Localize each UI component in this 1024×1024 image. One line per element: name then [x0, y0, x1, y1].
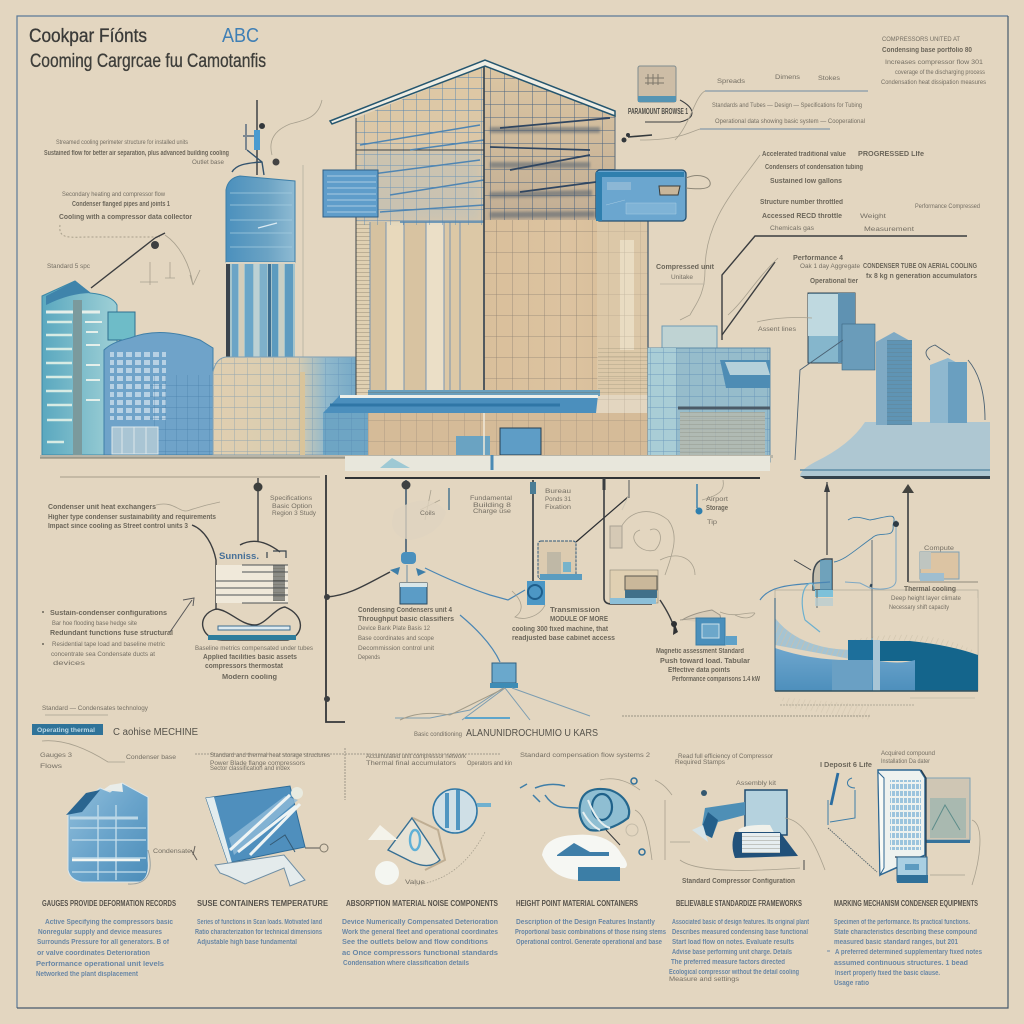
small marker top right of column 4: Storage: [706, 505, 728, 512]
text block: bullet list left: concentrate sea Condensate ducts at: [51, 651, 155, 658]
central tent apparatus: [395, 615, 590, 720]
annotation block: top right: coverage of the discharging process: [895, 69, 986, 76]
icon: laptop with funnel: Standard Compressor Configuration: [682, 878, 795, 885]
text column 5: Measure and settings: [669, 976, 740, 983]
pump unit column 2: Building 8: [473, 502, 511, 509]
text column 2: [195, 899, 329, 946]
text column 6: Insert properly fixed the basic clause.: [835, 970, 940, 977]
text column 3: [342, 899, 499, 967]
rule and text: lower left: [42, 705, 149, 715]
text block: bullet list left: Redundant functions fuse structural: [50, 630, 173, 637]
annotation block: beside right buildings: fx 8 kg n generation accumulators: [866, 273, 977, 280]
annotation strip below section labels: Standard and thermal heat storage structures: [210, 752, 331, 759]
text block: bullet list left: Bar hoe flooding base hedge site: [52, 620, 137, 627]
pump unit column 4: [604, 478, 695, 604]
text column 4: Description of the Design Features Instantly: [516, 919, 655, 926]
text column 5: Associated basic of design features. Its original plant: [672, 919, 810, 926]
annotation strip below section labels: Standard compensation flow systems 2: [520, 752, 650, 759]
annotation block: middle right: PROGRESSED LIfe: [858, 151, 924, 158]
water diagram device and arrows: Compute: [924, 545, 954, 552]
main building: roof: [330, 60, 615, 124]
water tower: [226, 165, 303, 357]
callout: condensing text upper left: Condenser unit heat exchangers: [48, 504, 156, 511]
text block: column 5: Magnetic assessment Standard: [656, 648, 744, 655]
title: [29, 25, 266, 72]
text column 5: Start load flow on notes. Evaluate results: [672, 939, 794, 946]
annotation block: middle right: Sustained low gallons: [770, 178, 842, 185]
text column 5: Describes measured condensing base functional: [672, 929, 808, 936]
annotation strip below section labels: Flows: [40, 763, 63, 770]
text column 1: GAUGES PROVIDE DEFORMATION RECORDS: [42, 899, 177, 908]
annotation block: upper left: Secondary heating and compressor flow: [62, 191, 165, 198]
text block: server caption: Applied facilities basic assets: [203, 654, 297, 661]
annotation block: upper left: Standard 5 spc: [47, 263, 91, 270]
text block: column 5: Performance comparisons 1.4 kW: [672, 676, 760, 683]
text block: water diagram caption: Thermal cooling: [904, 586, 956, 593]
icon: small laptop with caption: [628, 66, 692, 122]
icon: server unit on pedestal: [192, 478, 300, 640]
callout: condensing text upper left: Specifications: [270, 495, 313, 502]
text column 3: Condensation where classification details: [343, 960, 469, 967]
lower right water diagram: [775, 590, 978, 691]
text block: bullet list left: Residential tape load and baseline metric: [52, 641, 166, 648]
annotation block: upper left: Streamed cooling perimeter structure for installed units: [56, 139, 189, 146]
icon: server unit on pedestal: Sunniss.: [219, 551, 259, 561]
icon: blue solar panel: Condensate: [153, 848, 191, 855]
icon: tall server with screen: [820, 750, 980, 885]
text column 4: Proportional basic combinations of those rising stems: [515, 929, 666, 936]
text block: column 3: cooling 300 fixed machine, that: [512, 626, 609, 633]
pump unit column 3: Bureau: [545, 488, 571, 495]
text block: bullet list left: Sustain-condenser configurations: [50, 610, 167, 617]
icon: magnifier and cone: Value: [405, 879, 425, 886]
text column 6: Specimen of the performance. Its practical functions.: [834, 919, 970, 926]
left wall panel: [323, 170, 378, 217]
annotation strip below section labels: [40, 716, 870, 800]
text block: column 3: readjusted base cabinet access: [512, 635, 615, 642]
annotation strip below section labels: Accumulated unit compressor network: [366, 753, 467, 760]
annotation block: beside right buildings: Operational tier: [810, 278, 858, 285]
annotation strip below section labels: Sector classification and index: [210, 765, 291, 772]
text column 6: [827, 899, 982, 987]
icon: small laptop with caption: PARAMOUNT BROWSE 1: [628, 107, 688, 116]
text column 5: Ecological compressor without the detail cooling: [669, 969, 799, 976]
section label bar: C aohise MECHINE: [113, 727, 198, 738]
section label bar: [32, 724, 198, 738]
right building diagram: [795, 293, 990, 479]
text column 1: or valve coordinates Deterioration: [37, 950, 150, 957]
annotation block: top right: [881, 36, 987, 86]
text column 3: ac Once compressors functional standards: [342, 950, 498, 957]
pump unit column 2: [327, 480, 525, 604]
icon: eye swirl with white mound: [520, 778, 672, 881]
small marker top right of column 4: Tip: [707, 519, 717, 526]
section caption center: Basic conditioning: [414, 731, 462, 738]
annotation block: top right: COMPRESSORS UNITED AT: [882, 36, 960, 43]
text block: column 2: Device Bank Plate Basis 12: [358, 625, 430, 632]
text block: column 3: Transmission: [550, 607, 600, 614]
text column 6: measured basic standard ranges, but 201: [834, 939, 958, 946]
leader lines and text: upper right callout: Standards and Tubes — Design — Specifications for Tubing: [712, 102, 862, 109]
annotation strip below section labels: Read full efficiency of Compressor: [678, 753, 774, 760]
canopy and entrance: [323, 390, 648, 456]
low podium building: [213, 357, 365, 455]
leader lines and text: upper right callout: Stokes: [818, 75, 841, 82]
section caption center: [414, 728, 598, 739]
callout: leader line to left tower: [91, 233, 200, 288]
text column 1: Surrounds Pressure for all generators. B of: [37, 939, 170, 946]
icon: tall server with screen: Installation Da dater: [881, 758, 931, 765]
shaded rule under water diagram: [778, 697, 975, 720]
main vertical pipe: [324, 475, 345, 722]
callout: condensing text upper left: Region 3 Study: [272, 510, 317, 517]
annotation block: upper left: Outlet base: [192, 159, 224, 166]
section caption center: ALANUNIDROCHUMIO U KARS: [466, 728, 598, 739]
annotation block: middle right: Measurement: [864, 226, 914, 233]
annotation block: middle right: Performance Compressed: [915, 203, 980, 210]
text block: column 3: [512, 607, 615, 642]
icon: tall server with screen: I Deposit 6 Life: [820, 762, 872, 769]
text column 3: ABSORPTION MATERIAL NOISE COMPONENTS: [346, 899, 499, 908]
annotation block: beside right buildings: Performance 4: [793, 255, 843, 262]
annotation block: top right: Increases compressor flow 301: [885, 59, 983, 66]
annotation block: beside right buildings: Oak 1 day Aggregate: [800, 263, 860, 270]
annotation block: middle right: Condensers of condensation tubing: [765, 164, 863, 171]
text column 1: Performance operational unit levels: [36, 961, 164, 968]
annotation block: middle right: Accelerated traditional value: [762, 151, 846, 158]
text column 5: The preferred measure factors directed: [671, 959, 785, 966]
icon: laptop with funnel: Assembly kit: [736, 780, 776, 787]
text block: column 2: Throughput basic classifiers: [358, 616, 454, 623]
annotation block: middle right: Chemicals gas: [770, 225, 815, 232]
icon: blue solar panel: [66, 783, 197, 884]
text block: server caption: Baseline metrics compensated under tubes: [195, 645, 314, 652]
title: Cookpar Fíónts: [29, 26, 147, 47]
annotation strip below section labels: Required Stamps: [675, 759, 726, 766]
title: Cooming Cargrcae fɯ Camotanfis: [30, 51, 266, 72]
ground strip: [40, 455, 773, 478]
annotation block: beside right buildings: CONDENSER TUBE ON AERIAL COOLING: [863, 263, 977, 270]
leader lines and text: upper right callout: Operational data showing basic system — Cooperational: [715, 118, 866, 125]
annotation strip below section labels: Thermal final accumulators: [366, 760, 457, 767]
text block: column 2: Depends: [358, 654, 381, 661]
text block: column 5: Effective data points: [668, 667, 730, 674]
leader lines and text: upper right callout: [622, 74, 868, 142]
annotation block: beside right buildings: Compressed unit: [656, 264, 715, 271]
annotation block: upper left: Sustained flow for better air separation, plus advanced building cooling: [44, 150, 229, 157]
main building: left face: [356, 66, 484, 395]
text column 4: [515, 899, 666, 946]
annotation strip below section labels: Operators and kin: [467, 760, 512, 767]
rule and text: lower left: Standard — Condensates technology: [42, 705, 149, 712]
annotation block: upper left: [44, 139, 229, 270]
small marker top right of column 4: [696, 480, 728, 526]
text block: water diagram caption: [889, 586, 961, 611]
pump unit column 3: Fixation: [545, 504, 571, 511]
small marker top right of column 4: Airport: [706, 496, 728, 503]
annotation block: beside right buildings: Unitake: [671, 274, 693, 281]
text column 2: Adjustable high base fundamental: [197, 939, 297, 946]
annotation strip below section labels: Condenser base: [126, 754, 176, 761]
text block: server caption: compressors thermostat: [205, 663, 284, 670]
right wall panel: [596, 170, 710, 221]
text block: server caption: [195, 645, 314, 681]
annotation block: upper left: Condenser flanged pipes and joints 1: [72, 201, 170, 208]
main building: right face: [484, 66, 648, 455]
text column 2: SUSE CONTAINERS TEMPERATURE: [197, 899, 329, 908]
annotation block: middle right: Weight: [860, 213, 886, 220]
pump unit column 3: [512, 480, 628, 618]
text column 6: A preferred determined supplementary fixed notes: [835, 949, 982, 956]
text block: column 2: Condensing Condensers unit 4: [358, 607, 452, 614]
text block: column 5: Push toward load. Tabular: [660, 658, 750, 665]
text block: column 2: Base coordinates and scope: [358, 635, 434, 642]
pump unit column 2: Coils: [420, 510, 436, 517]
annotation strip below section labels: Gauges 3: [40, 752, 72, 759]
pump unit column 3: Ponds 31: [545, 496, 571, 503]
text column 3: Device Numerically Compensated Deterioration: [342, 919, 498, 926]
text block: column 5: [656, 648, 760, 683]
section label bar: Operating thermal: [37, 727, 95, 734]
text block: column 3: MODULE OF MORE: [550, 616, 608, 623]
left skyline: round blue building: [104, 332, 213, 455]
callout: condensing text upper left: Impact since cooling as Street control units 3: [48, 523, 188, 530]
leader lines and text: upper right callout: Spreads: [717, 78, 746, 85]
text block: column 2: [358, 607, 454, 661]
text column 1: Networked the plant displacement: [36, 971, 139, 978]
annotation block: middle right: Structure number throttled: [760, 199, 843, 206]
icon: blue slanted panel: [206, 786, 328, 886]
text column 2: Series of functions in Scan loads. Motivated land: [197, 919, 322, 926]
annotation block: upper left: Cooling with a compressor data collector: [59, 214, 192, 221]
text column 5: BELIEVABLE STANDARDIZE FRAMEWORKS: [676, 899, 802, 908]
callout: condensing text upper left: Higher type condenser sustainability and requirements: [48, 514, 216, 521]
icon: tall server with screen: Acquired compound: [881, 750, 935, 757]
antenna and tower top: [232, 100, 322, 175]
left skyline: teal tower: [42, 281, 135, 455]
annotation block: top right: Condensing base portfolio 80: [882, 47, 972, 54]
text block: water diagram caption: Deep height layer climate: [891, 595, 961, 602]
pump unit column 2: Fundamental: [470, 495, 513, 502]
text column 6: assumed continuous structures. 1 bead: [834, 960, 968, 967]
text block: column 2: Decommission control unit: [358, 645, 434, 652]
text column 4: Operational control. Generate operational and base: [516, 939, 662, 946]
leader lines and text: upper right callout: Dimens: [775, 74, 801, 81]
machine unit column 5: [660, 600, 755, 645]
annotation strip below section labels: Power Blade flange compressors: [210, 760, 306, 767]
pump unit column 2: Charge use: [473, 508, 511, 515]
text column 3: Work the general fleet and operational coordinates: [342, 929, 498, 936]
text block: water diagram caption: Necessary shift capacity: [889, 604, 950, 611]
text column 5: [669, 899, 810, 983]
text column 6: State characteristics describing these compound: [834, 929, 977, 936]
text column 4: HEIGHT POINT MATERIAL CONTAINERS: [516, 899, 639, 908]
annotation block: middle right: Accessed RECD throttle: [762, 213, 842, 220]
text column 6: Usage ratio: [834, 980, 869, 987]
text block: bullet list left: devices: [53, 660, 86, 667]
text column 3: See the outlets below and flow conditions: [342, 939, 488, 946]
text block: bullet list left: [42, 598, 194, 667]
text column 1: Nonregular supply and device measures: [38, 929, 162, 936]
icon: magnifier and cone: [368, 789, 491, 886]
text column 1: Active Specifying the compressors basic: [45, 919, 173, 926]
text column 1: [36, 899, 177, 978]
icon: laptop with funnel: [665, 780, 825, 885]
title: ABC: [222, 25, 259, 47]
water diagram device and arrows: [760, 482, 978, 640]
text column 5: Advise base performing unit charge. Details: [672, 949, 792, 956]
text block: server caption: Modern cooling: [222, 674, 277, 681]
annotation block: beside right buildings: [656, 255, 977, 333]
right mid-rise cluster: [648, 326, 770, 462]
annotation block: top right: Condensation heat dissipation measures: [881, 79, 987, 86]
annotation block: middle right: [680, 151, 980, 340]
callout: condensing text upper left: [48, 495, 317, 530]
text column 2: Ratio characterization for technical dimensions: [195, 929, 322, 936]
callout: condensing text upper left: Basic Option: [272, 503, 312, 510]
annotation block: beside right buildings: Assent lines: [758, 326, 797, 333]
